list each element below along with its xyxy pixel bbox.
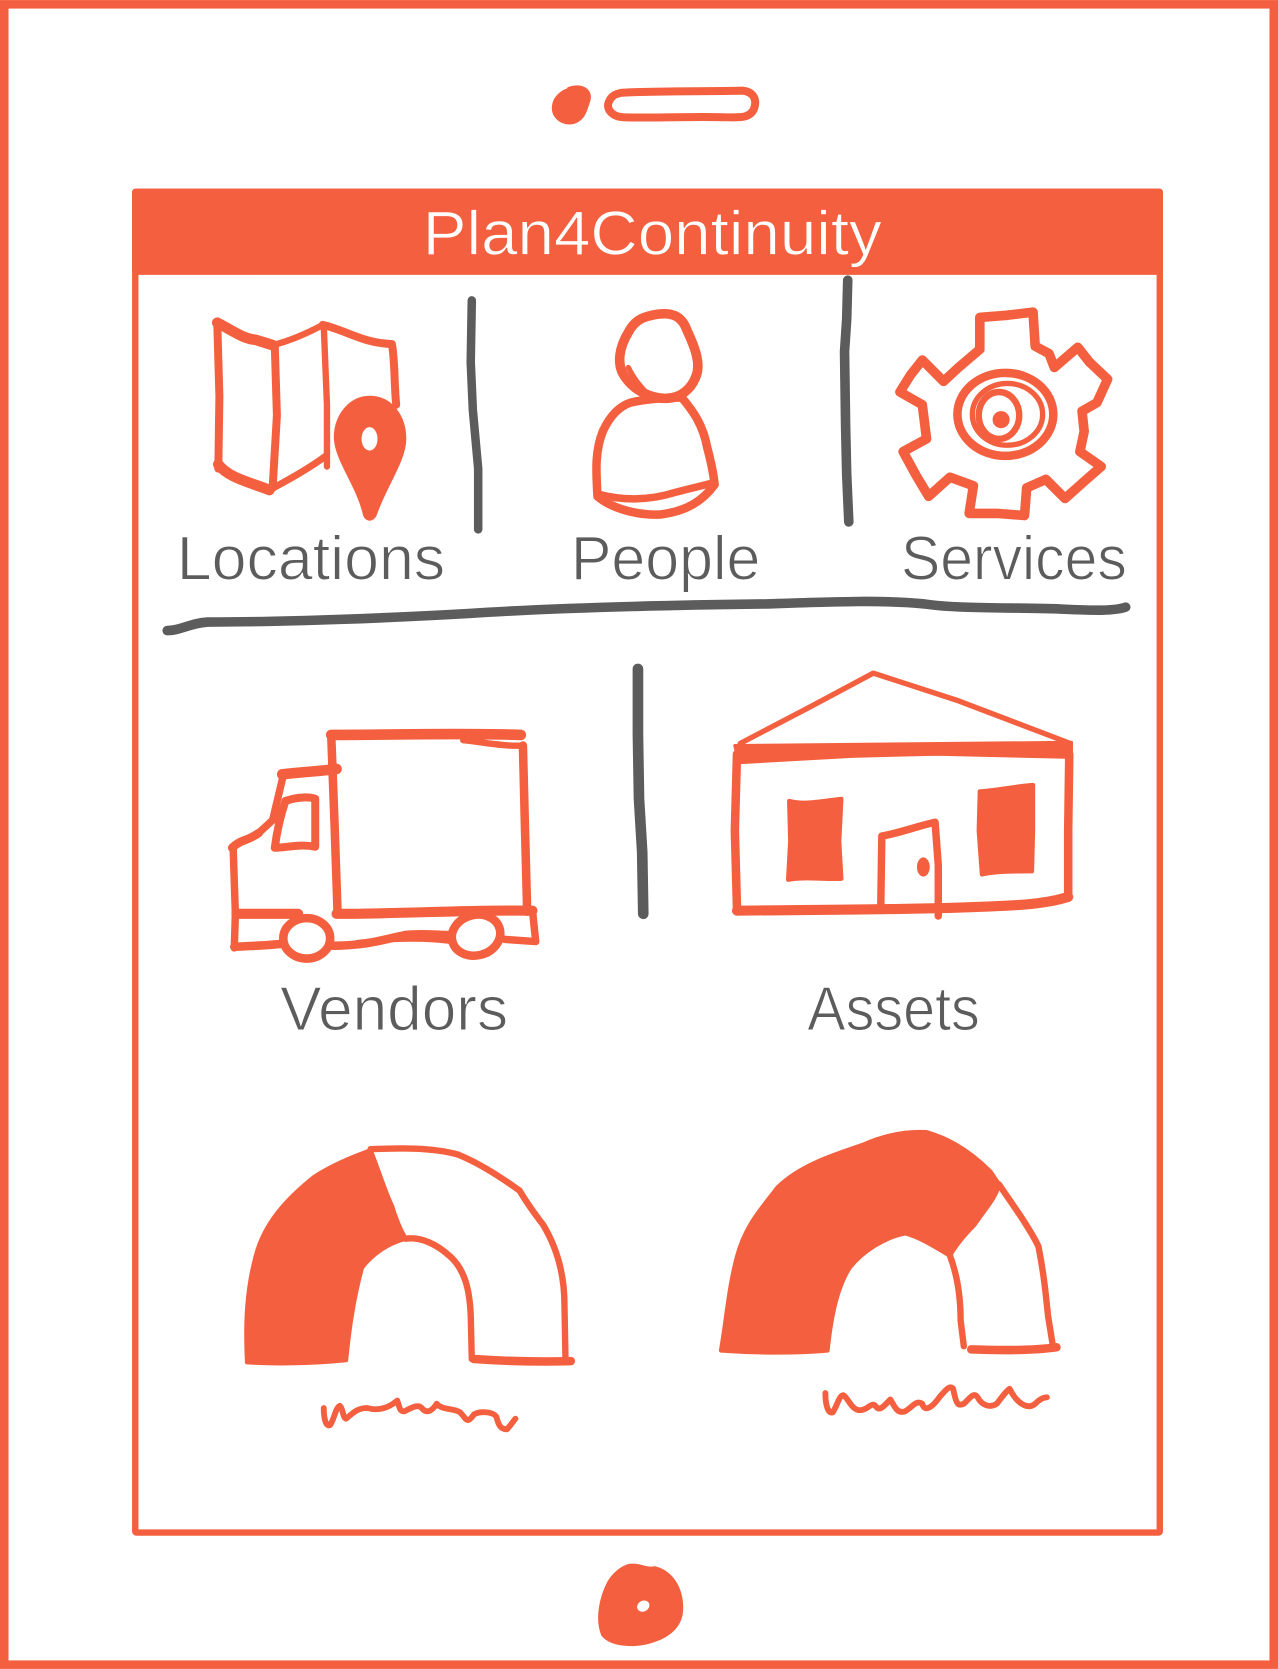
- icon: delivery truck: [232, 734, 536, 961]
- divider: [471, 300, 478, 529]
- gauge: right semicircle about two thirds full: [721, 1132, 1056, 1353]
- horizontal divider: [167, 601, 1126, 631]
- home button: [600, 1565, 682, 1644]
- icon: person: [596, 314, 715, 515]
- divider: [845, 280, 849, 522]
- gauge: left semicircle about one third full: [246, 1148, 571, 1363]
- icon: map with location pin: [217, 323, 405, 519]
- label: People: People: [571, 524, 760, 593]
- label: Vendors: Vendors: [280, 975, 508, 1044]
- icon: building: [735, 673, 1071, 916]
- app title: Plan4Continuity: [423, 200, 882, 269]
- app screen: [132, 189, 1163, 1533]
- vertical divider: [638, 669, 643, 914]
- icon: gear: [900, 312, 1108, 516]
- label: Locations: Locations: [177, 524, 445, 593]
- label: Services: Services: [901, 524, 1127, 593]
- app header bar: [132, 189, 1163, 275]
- label scribble: left gauge: [324, 1401, 515, 1429]
- icon: location pin: [335, 397, 405, 519]
- label: Assets: Assets: [807, 975, 980, 1044]
- camera and speaker: [553, 87, 755, 123]
- label scribble: right gauge: [825, 1387, 1047, 1413]
